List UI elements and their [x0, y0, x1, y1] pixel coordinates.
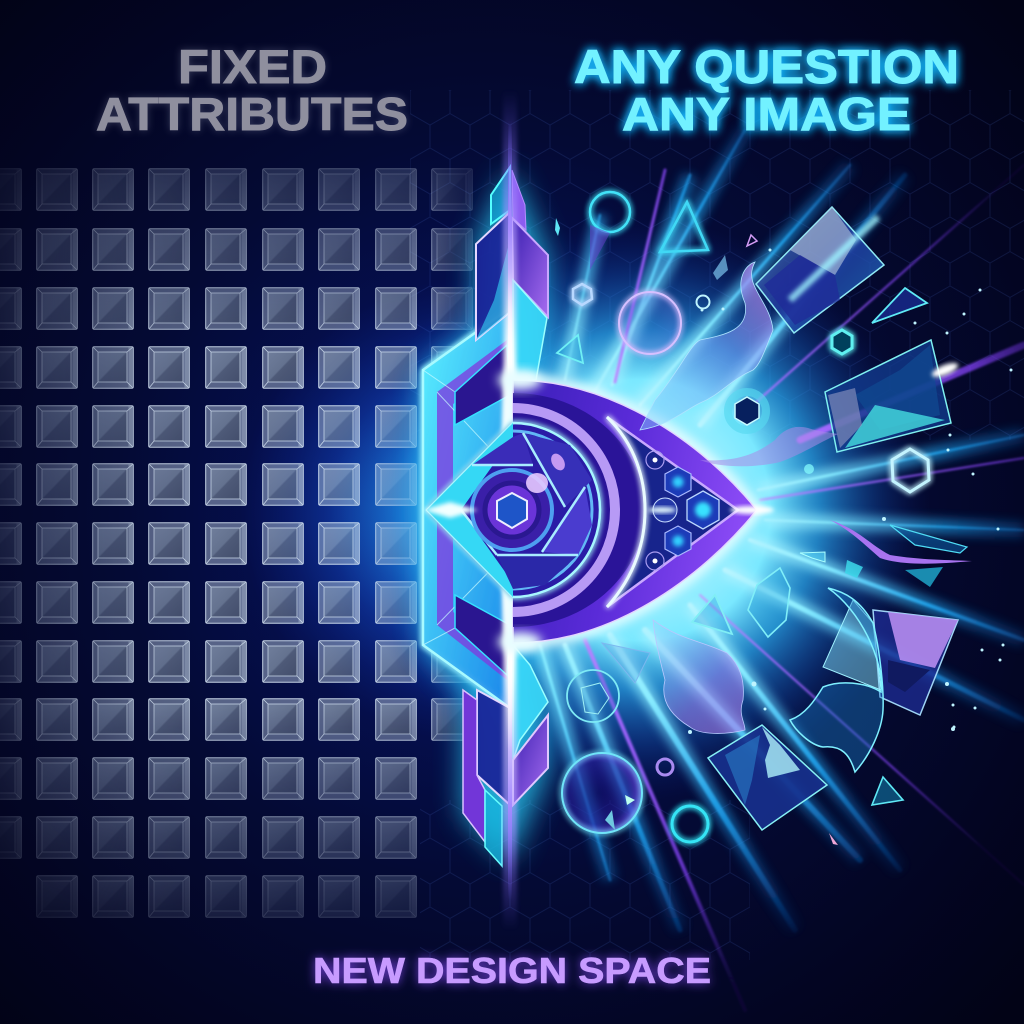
tile grid: fixed attributes: [0, 169, 472, 917]
crystal column: [423, 90, 548, 930]
eye lens emblem: [423, 370, 774, 652]
control panel: [607, 417, 738, 607]
glow behind rays: [350, 220, 930, 800]
hex teal: [832, 330, 852, 354]
top shards: [491, 167, 510, 224]
tile row 3: [0, 288, 472, 329]
lens highlight small: [548, 451, 568, 473]
bubble upper: [619, 292, 681, 354]
purple left band: [437, 340, 507, 680]
triangle near eye: [557, 335, 583, 363]
hex ring inner: [735, 397, 759, 425]
upper hex node: [665, 467, 691, 497]
heading line: any image: ANY IMAGE: [622, 88, 911, 140]
hex shard lower: [748, 568, 790, 637]
heading line: fixed: FIXED: [178, 40, 327, 93]
aperture blade bottom: [497, 555, 578, 589]
lens highlight large: [526, 473, 548, 493]
dark purple block lower: [455, 595, 510, 675]
large hexagon right: [892, 449, 929, 492]
lens mid ring: [485, 483, 539, 537]
small purple ring: [657, 759, 673, 775]
tile row 5: [0, 406, 472, 447]
heading line: attributes: ATTRIBUTES: [96, 88, 408, 140]
tile row 12: [0, 817, 416, 858]
aperture blade lines: [461, 433, 585, 555]
title: fixed attributes: [96, 40, 408, 140]
lower left panel: [477, 690, 510, 805]
pink spark: [829, 833, 838, 845]
cyan facet upper left: [476, 240, 510, 340]
cyan ring bottom: [672, 806, 708, 842]
lens body: diamond left, round right: [427, 423, 600, 597]
tile row 4: [0, 347, 472, 388]
sparkle dots: [688, 248, 1012, 734]
blue rim: [513, 431, 592, 589]
faint triangle: [602, 643, 650, 683]
hex ring: [728, 392, 766, 430]
tile row 7: [0, 523, 472, 564]
ring purple tail: [590, 225, 610, 270]
main left crystal: [423, 308, 510, 708]
title: any question any image: [574, 40, 959, 140]
purple rays: [585, 165, 1024, 1010]
wave ribbon upper: [640, 262, 773, 430]
cyan left facets: [427, 423, 513, 597]
lower outer purple shard: [463, 690, 485, 842]
light band panel: [823, 600, 881, 690]
tile row 13: [37, 876, 416, 917]
panel shape: [607, 417, 738, 607]
heading line: any question: ANY QUESTION: [574, 40, 959, 93]
lower right cyan: [513, 645, 548, 760]
center round node: [648, 498, 677, 522]
faceted triangle right: [872, 288, 927, 323]
junction bloom top: [498, 370, 542, 390]
lower round node: [646, 552, 664, 570]
tile row 10: [0, 699, 472, 740]
lower cyan shard: [485, 790, 502, 866]
shard cluster right: [890, 525, 967, 553]
star flare left: [423, 502, 478, 518]
tile row 2: [0, 229, 472, 270]
triangle top: [660, 202, 708, 252]
lens outer ring: [472, 470, 552, 550]
aperture blade right: [542, 487, 592, 555]
small hexagon: [573, 284, 592, 305]
small round dot: [804, 464, 814, 474]
flying fragments: [555, 192, 1012, 845]
ring upper: [590, 192, 630, 232]
image card 1: [756, 207, 884, 333]
image card 2: [825, 340, 960, 452]
bubble lower small: [567, 670, 619, 722]
crystal glow: [423, 170, 548, 860]
panel inner white arc: [607, 417, 645, 607]
tile row 6: [0, 464, 472, 505]
glow left of crystal: [240, 280, 530, 740]
sharp cyan rays: [540, 130, 1024, 930]
upper right panel: [512, 218, 548, 317]
small triangle: [747, 235, 757, 246]
small ring upper: [696, 296, 710, 308]
lens center hexagon: [497, 493, 527, 528]
tile row 11: [0, 758, 416, 799]
eye tip flare: [730, 506, 774, 514]
eye outer glow: [513, 380, 757, 643]
upper left panel: [476, 212, 510, 340]
wave ribbon lower: [653, 620, 745, 733]
crystal facet lines: [423, 370, 510, 645]
hexagon background pattern: [410, 90, 1024, 960]
tile row 9: [0, 641, 472, 682]
tile row 8: [0, 582, 472, 623]
triangle lower: [692, 595, 732, 634]
cyan ray halos: [540, 130, 1024, 930]
central light spine: [499, 90, 521, 930]
curved glass sheet: [790, 588, 883, 772]
aperture blade left top: [472, 433, 533, 465]
aperture blade top: [523, 433, 592, 507]
triangle bottom right: [872, 777, 903, 805]
large hex node: [687, 491, 719, 529]
tile row 1: [0, 169, 472, 210]
wave purple streak: [830, 520, 972, 564]
lower right panel: [513, 715, 548, 805]
caption: new design space: NEW DESIGN SPACE: [313, 950, 711, 991]
lower hex node: [665, 526, 691, 556]
tiny shard near crystal: [555, 218, 560, 236]
dark purple block upper: [455, 345, 510, 425]
bubble lower large: [562, 753, 642, 833]
eye outer shell: [513, 380, 757, 643]
lavender metal ring: [513, 408, 615, 612]
crescent dark band: [513, 393, 645, 627]
upper round node: [646, 451, 664, 469]
small shard upper: [713, 255, 728, 280]
junction bloom bottom: [498, 632, 542, 652]
image card 4: [708, 725, 827, 830]
image card 3: [873, 610, 958, 715]
cyan wedge above eye: [513, 280, 547, 380]
wave ribbon middle: [700, 427, 838, 466]
light rays burst: [540, 130, 1024, 1010]
